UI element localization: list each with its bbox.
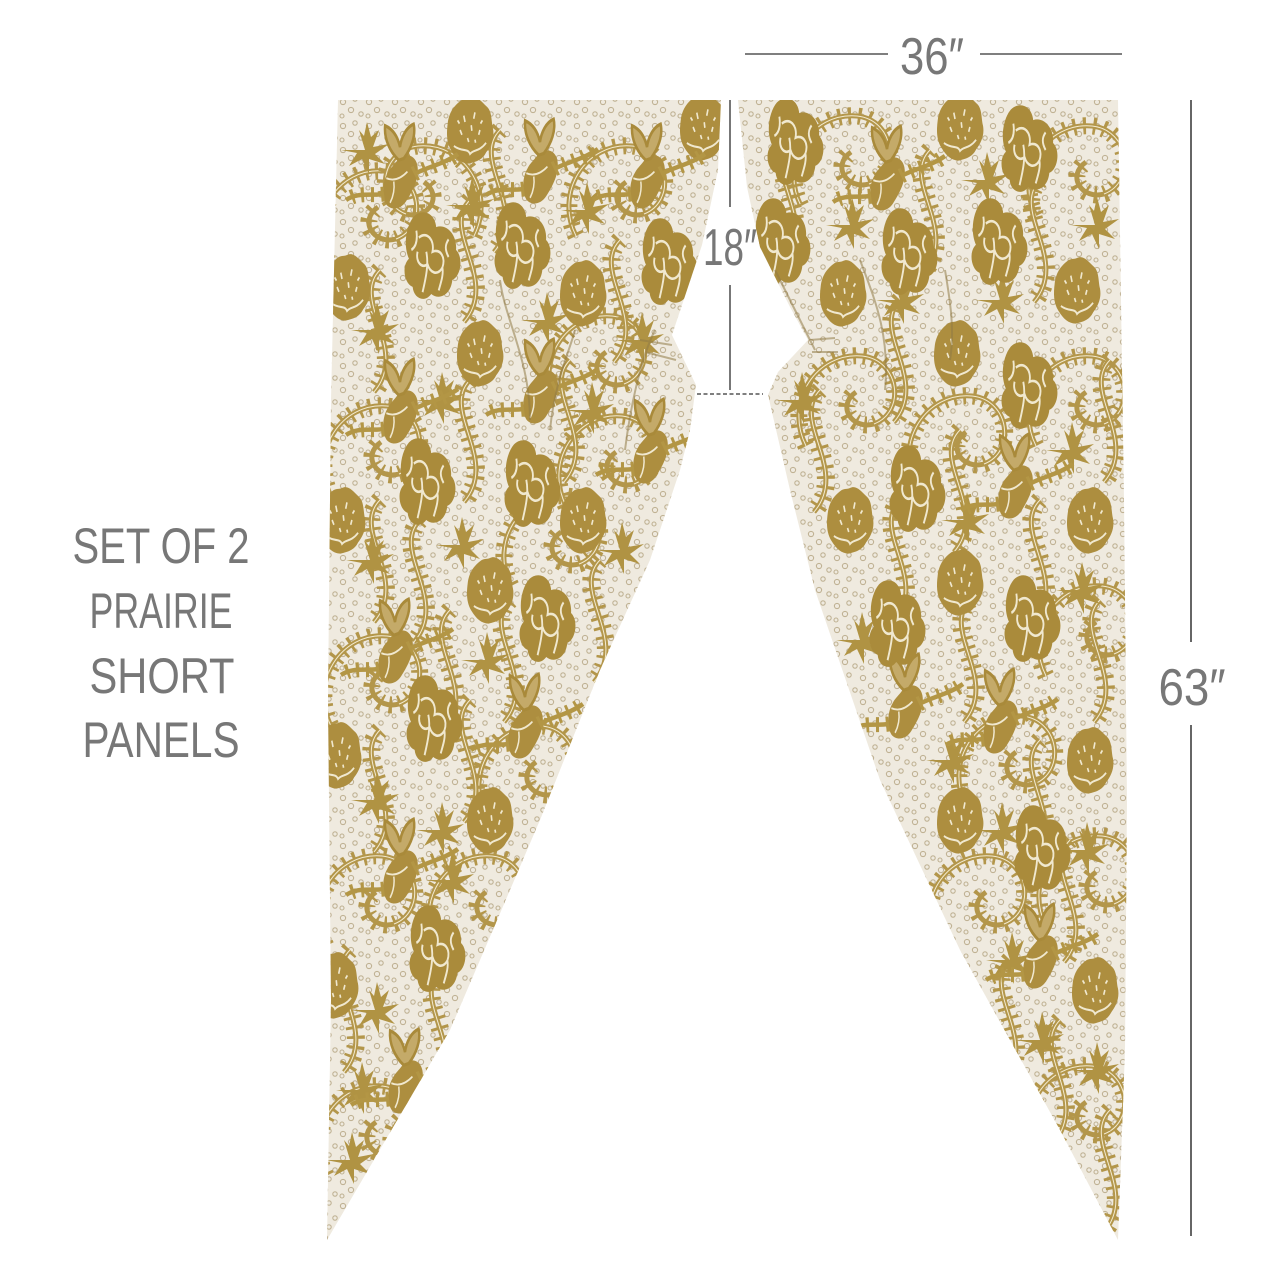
dimension: length 63 inches: 63″: [1158, 659, 1226, 717]
title: set of 2 prairie short panels: SET OF 2: [72, 518, 250, 574]
right curtain panel: [730, 94, 1140, 1245]
title: set of 2 prairie short panels: PANELS: [82, 712, 240, 768]
dimension: tieback 18 inches: 18″: [703, 219, 757, 277]
gathered folds: [500, 280, 676, 450]
title: set of 2 prairie short panels: SHORT: [90, 648, 234, 704]
title: set of 2 prairie short panels: PRAIRIE: [90, 583, 232, 639]
dimension: width 36 inches: 36″: [900, 28, 964, 86]
left curtain panel: [312, 94, 730, 1245]
title: set of 2 prairie short panels: [72, 518, 250, 768]
gathered folds: [775, 260, 952, 390]
